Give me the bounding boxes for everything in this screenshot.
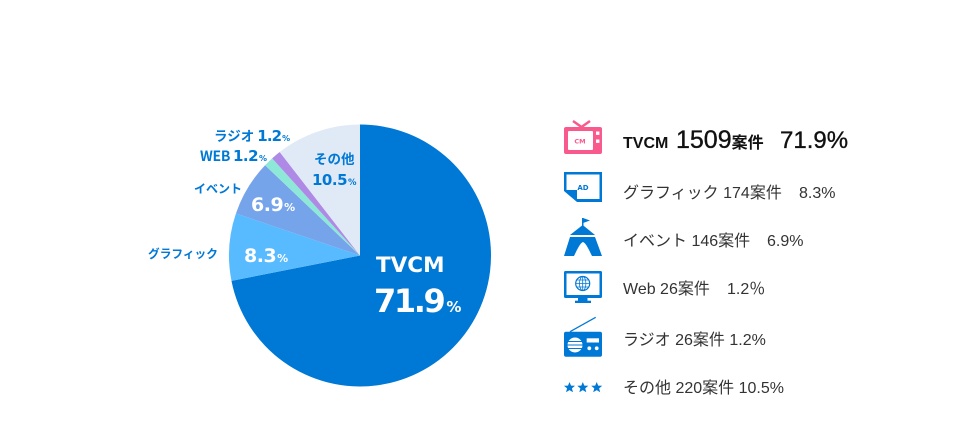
- label: web 1.2%: WEB 1.2%: [200, 146, 267, 166]
- legend: event: イベント 146案件: [623, 233, 750, 250]
- icon: ad sheet: AD: [577, 184, 589, 192]
- label: graphic: グラフィック: [148, 245, 218, 262]
- legend: TVCM: 1509: [676, 126, 732, 154]
- label: TVCM 71.9%: TVCM: [376, 253, 444, 278]
- label: other 10.5%: 10.5%: [312, 171, 357, 189]
- legend: other: その他 220案件 10.5%: [623, 379, 784, 397]
- legend: graphic: グラフィック 174案件: [623, 185, 782, 202]
- legend: web: 1.2％: [727, 281, 765, 298]
- icon: tent: [564, 218, 602, 256]
- label: event 6.9%: 6.9%: [251, 194, 295, 216]
- icon: ad sheet: [564, 172, 602, 202]
- slice: event: [236, 165, 360, 256]
- legend: TVCM: TVCM: [623, 135, 668, 152]
- slice: web: [265, 158, 360, 256]
- icon: monitor: [564, 271, 602, 303]
- legend: event: 6.9%: [767, 233, 803, 250]
- label: graphic 8.3%: 8.3%: [244, 245, 288, 267]
- legend: graphic: 8.3%: [799, 185, 835, 202]
- label: other 10.5%: [312, 148, 357, 189]
- pie chart: [229, 124, 491, 387]
- icon: tv: [564, 121, 602, 154]
- label: other 10.5%: その他: [314, 148, 355, 168]
- slice: radio: [272, 152, 360, 256]
- legend: radio: ラジオ 26案件 1.2%: [623, 331, 766, 349]
- slice: graphic: [229, 213, 360, 281]
- label: TVCM 71.9%: 71.9%: [374, 282, 461, 320]
- icon: stars: [564, 382, 602, 392]
- slice: TVCM: [231, 124, 491, 387]
- label: radio 1.2%: ラジオ 1.2%: [214, 125, 290, 145]
- icon: tv: CM: [574, 138, 586, 146]
- legend: web: Web 26案件: [623, 281, 710, 298]
- legend: TVCM: 71.9%: [780, 127, 848, 154]
- label: TVCM 71.9%: [374, 253, 461, 320]
- slice: other: [280, 124, 360, 256]
- legend: TVCM: 案件: [732, 134, 764, 152]
- label: event: イベント: [194, 180, 242, 197]
- icon: radio: [564, 317, 602, 357]
